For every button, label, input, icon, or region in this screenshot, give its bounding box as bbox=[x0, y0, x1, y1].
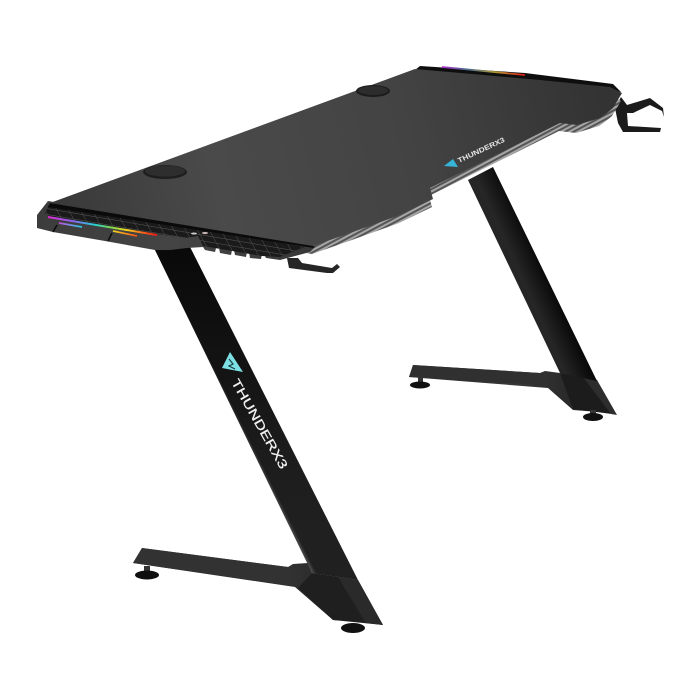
front rgb strip bbox=[48, 217, 157, 235]
front grille bbox=[45, 205, 313, 257]
cable grommet right bbox=[356, 85, 390, 97]
rear foot bar bbox=[409, 365, 612, 413]
desk logo icon bbox=[444, 159, 458, 167]
rear foot pad right bbox=[583, 410, 603, 421]
front foot bar bbox=[133, 548, 383, 625]
desk brand text: THUNDERX3 bbox=[457, 137, 506, 165]
control buttons bbox=[191, 232, 208, 234]
rear foot pad left bbox=[410, 377, 430, 388]
small rgb strip left bbox=[59, 223, 82, 227]
grille shadow under desk top bbox=[48, 203, 314, 248]
front headset hook bbox=[287, 258, 340, 273]
leg logo icon bbox=[222, 352, 243, 372]
rear rgb strip bbox=[442, 67, 525, 75]
rear upright bbox=[468, 167, 597, 381]
face slits bbox=[53, 225, 112, 241]
small rgb strip right bbox=[113, 231, 137, 236]
front foot pad left bbox=[135, 566, 159, 580]
right cup holder hook bbox=[615, 97, 664, 132]
cable grommet left bbox=[143, 165, 187, 179]
front foot pad right bbox=[341, 623, 365, 633]
rear leg with foot bbox=[409, 167, 617, 421]
front leg with foot bbox=[133, 247, 383, 633]
leg brand text: THUNDERX3 bbox=[228, 377, 290, 471]
front face of the desk bbox=[37, 201, 316, 260]
carbon fibre edge bbox=[49, 77, 621, 254]
rear grille strip bbox=[415, 66, 621, 92]
front upright bbox=[155, 247, 358, 580]
desk top surface bbox=[50, 69, 622, 246]
